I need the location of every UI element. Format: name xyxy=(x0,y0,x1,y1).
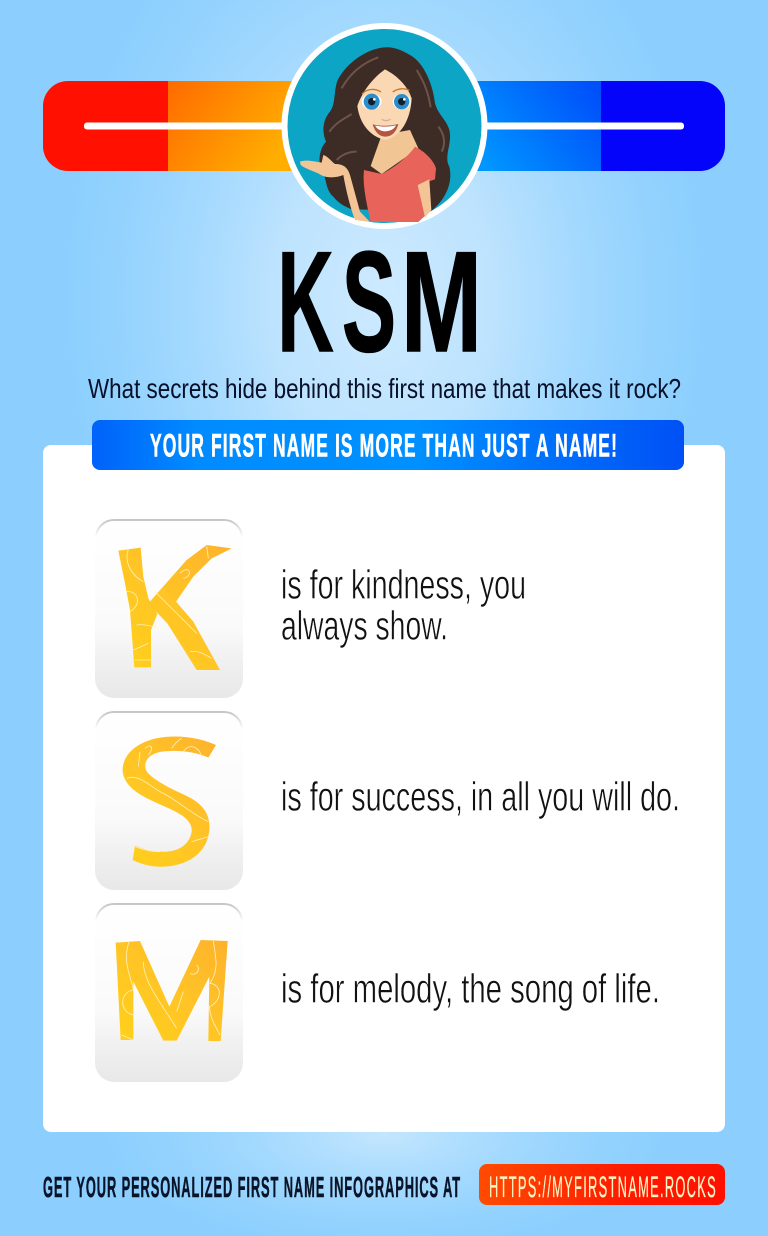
header colour bar xyxy=(43,81,725,171)
title: K xyxy=(278,223,334,382)
avatar: cartoon woman in circle xyxy=(284,26,484,226)
eyebrows xyxy=(362,89,409,94)
tile M xyxy=(95,904,243,1082)
face xyxy=(357,69,412,140)
text K xyxy=(281,562,526,648)
title: S xyxy=(342,223,396,382)
row S xyxy=(95,712,680,890)
footer url button xyxy=(479,1164,725,1205)
tile K xyxy=(95,520,243,698)
text K: always show. xyxy=(281,602,448,648)
hair xyxy=(320,47,450,211)
tile S xyxy=(95,712,243,890)
neck and chest xyxy=(371,130,418,174)
shirt xyxy=(364,147,436,222)
content panel xyxy=(43,420,725,1132)
row K xyxy=(95,520,526,698)
arm and hand xyxy=(300,155,370,222)
eyes xyxy=(362,94,382,109)
title: M xyxy=(401,223,482,382)
text K: is for kindness, you xyxy=(281,562,526,608)
nose and mouth xyxy=(382,119,391,121)
row M xyxy=(95,904,660,1082)
banner xyxy=(92,420,684,470)
